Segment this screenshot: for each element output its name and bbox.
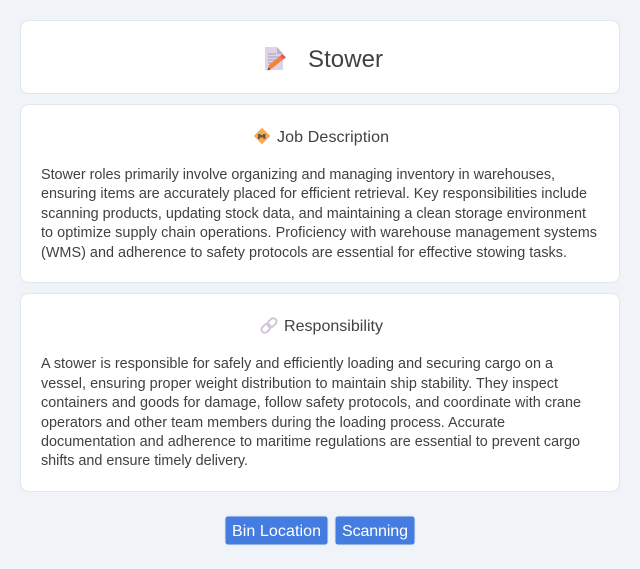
icon: orange diamond sign	[254, 128, 270, 144]
text block: responsibility body: shifts and ensure timely delivery.	[41, 453, 248, 469]
icon: chain link	[260, 317, 278, 334]
icon: document with pencil	[265, 47, 286, 70]
text block: responsibility body: operators and other team members during the loading process. Accurate	[41, 415, 505, 431]
tag: Scanning	[335, 516, 415, 545]
heading: Job Description: Job Description	[277, 129, 389, 146]
tag: Bin Location: Bin Location	[232, 523, 321, 540]
tag: Bin Location	[225, 516, 328, 545]
heading: Stower: Stower	[308, 46, 383, 73]
text block: job description body: Stower roles primarily involve organizing and managing inventory in warehouses,	[41, 167, 555, 183]
text block: responsibility body: documentation and adherence to maritime regulations are essential to prevent cargo	[41, 434, 580, 450]
text block: job description body: scanning products, updating stock data, and maintaining a clean storage environment	[41, 206, 586, 222]
panel: title	[20, 20, 620, 94]
text block: responsibility body: containers and goods for damage, follow safety protocols, and coordinate with crane	[41, 395, 581, 411]
text block: responsibility body: A stower is responsible for safely and efficiently loading and securing cargo on a	[41, 356, 553, 372]
panel: job description	[20, 104, 620, 282]
panel: responsibility	[20, 294, 620, 492]
heading: Responsibility: Responsibility	[284, 318, 383, 335]
text block: job description body: (WMS) and adherence to safety protocols are essential for effective stowing tasks.	[41, 245, 567, 261]
text block: job description body: ensuring items are accurately placed for efficient retrieval. Key responsibilities include	[41, 186, 587, 202]
text block: responsibility body	[41, 356, 581, 469]
text block: job description body: to optimize supply chain operations. Proficiency with warehouse management systems	[41, 225, 597, 241]
text block: job description body	[41, 167, 597, 261]
text block: responsibility body: vessel, ensuring proper weight distribution to maintain ship stability. They inspect	[41, 376, 558, 392]
tag: Scanning: Scanning	[342, 523, 408, 540]
